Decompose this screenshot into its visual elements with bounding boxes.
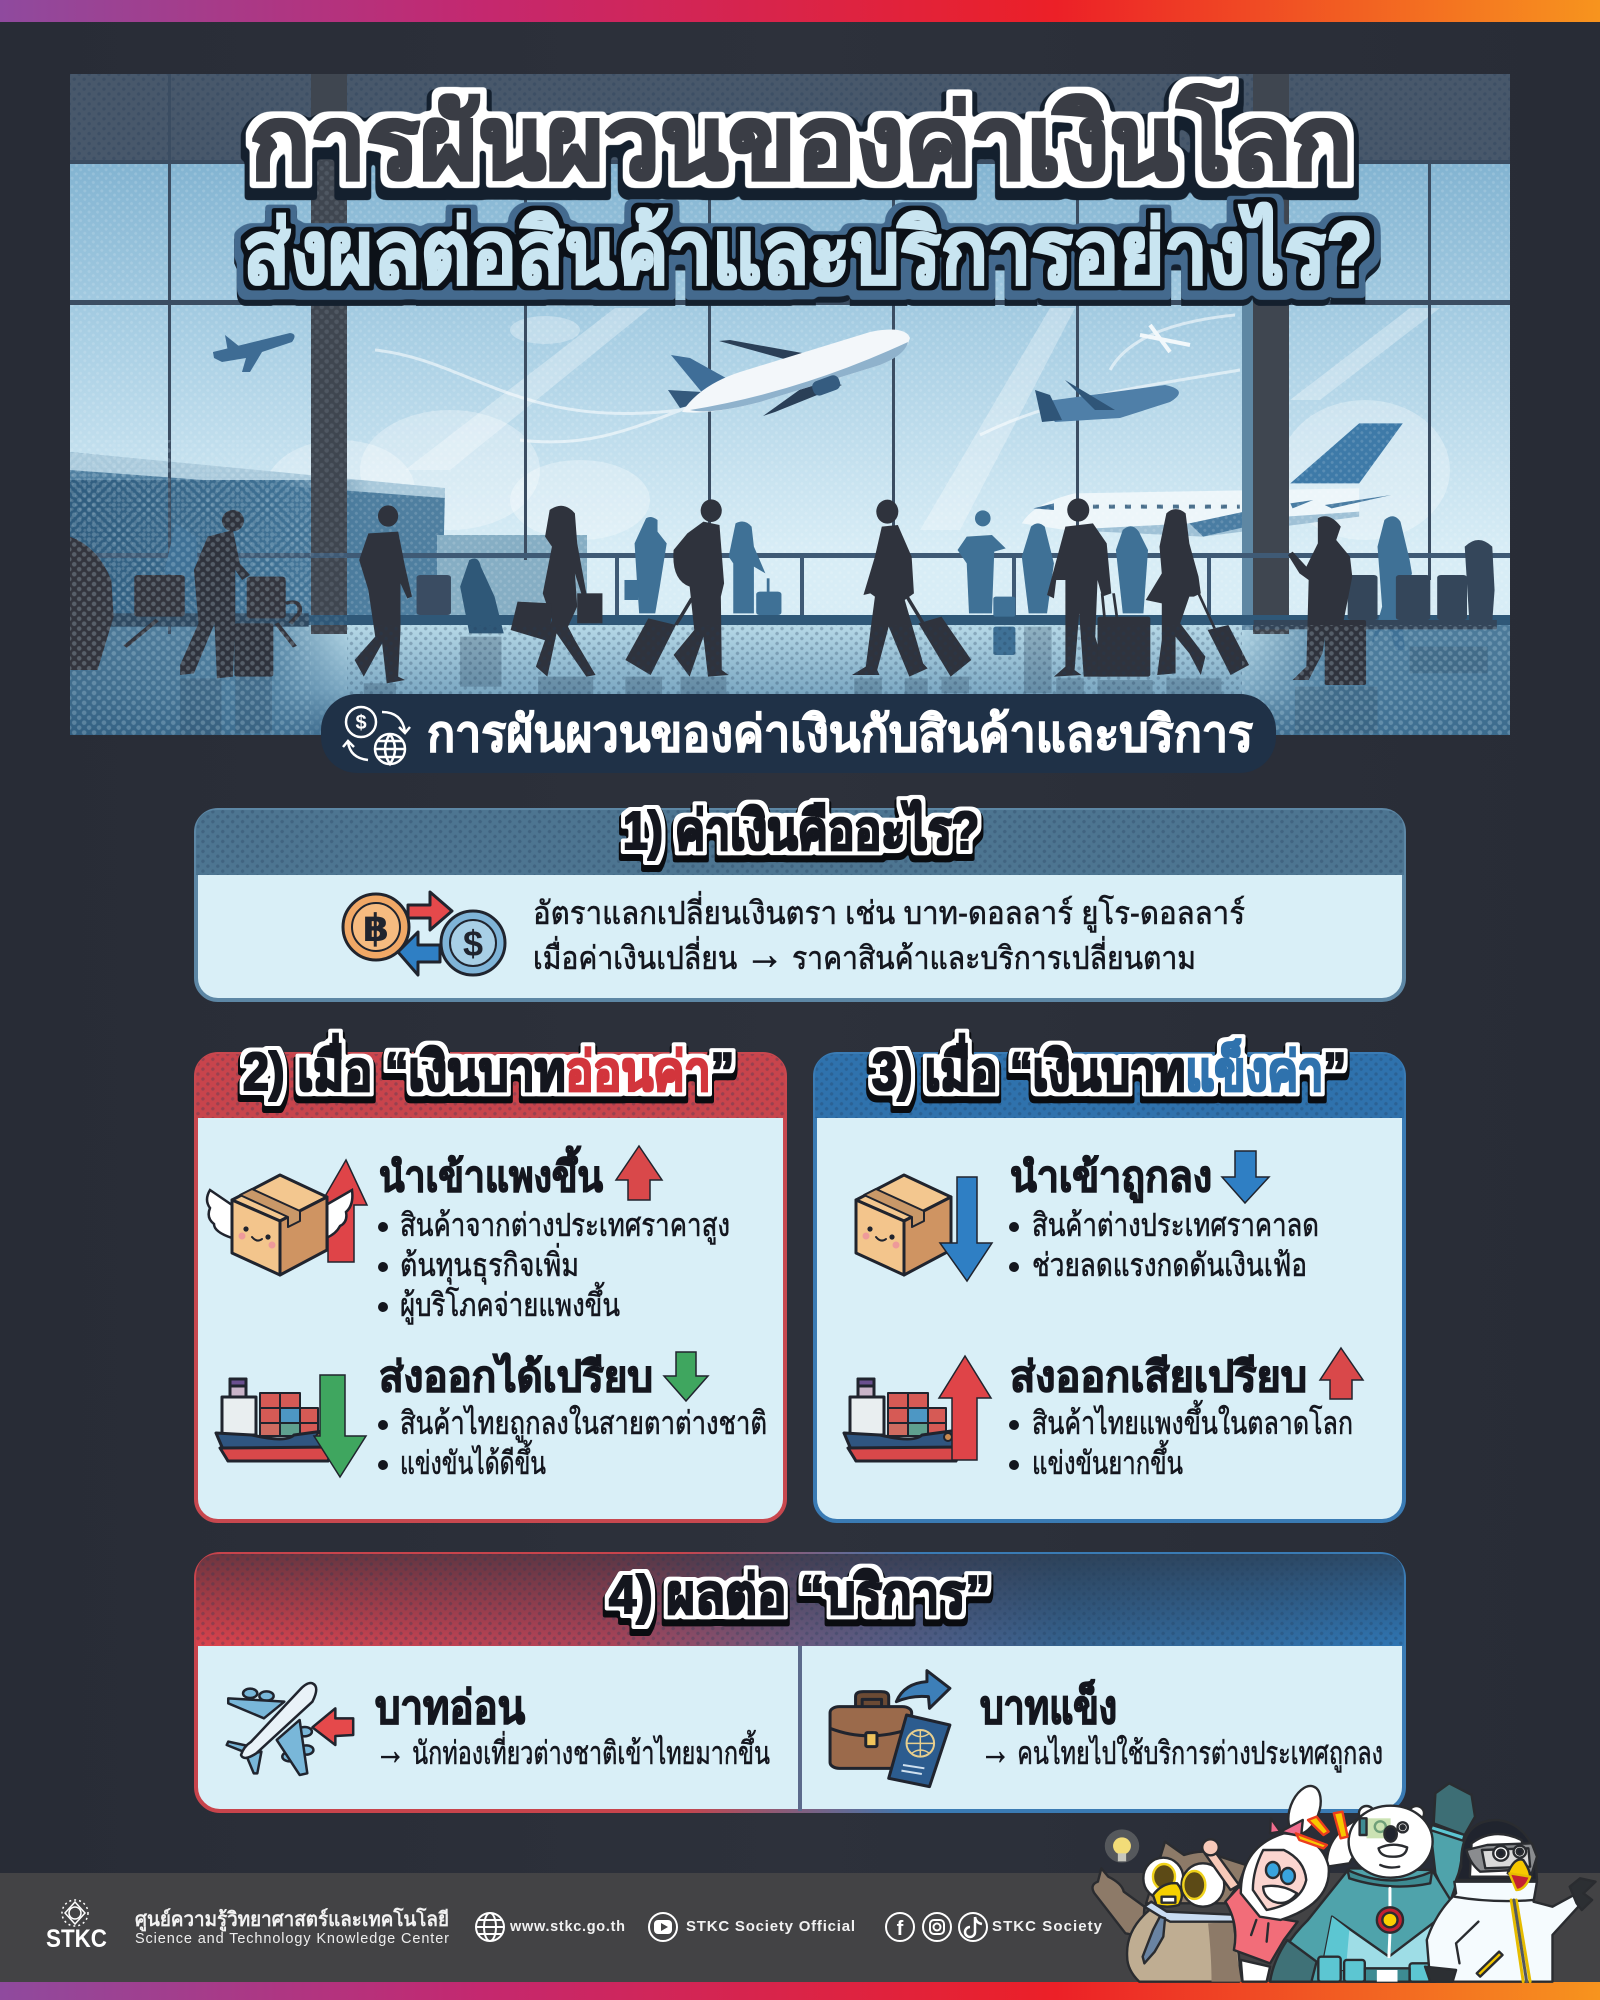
columns [311, 74, 347, 634]
bullet list: imports [378, 1207, 730, 1325]
hero illustration: airport terminal [70, 74, 1510, 735]
exclamation marks [1296, 1812, 1348, 1848]
panel 4: effect on services [196, 1554, 1404, 1811]
panel 3: strong baht [815, 1033, 1404, 1521]
icon: box with down arrow [856, 1175, 992, 1281]
small plane top left [213, 333, 295, 372]
icon: plane with inbound arrow [227, 1683, 353, 1775]
footer social icons: STKC Society [992, 1918, 1103, 1935]
bottom gradient bar [0, 1982, 1600, 2000]
bullet list: exports [1009, 1400, 1353, 1481]
travellers, left half [70, 499, 781, 735]
sub-heading: exports: ส่งออกได้เปรียบ [379, 1352, 653, 1400]
glass halftone [70, 160, 1510, 735]
title: first line: การผันผวนของค่าเงินโลก [250, 84, 1352, 200]
icon: ship with down arrow [216, 1375, 366, 1477]
roof band [70, 74, 1510, 160]
heading: 2) เมื่อ “เงินบาทอ่อนค่า” [243, 1033, 734, 1102]
icon: ship with up arrow [844, 1356, 991, 1461]
label: strong baht: บาทแข็ง [980, 1679, 1117, 1733]
bullet list: imports: ผู้บริโภคจ่ายแพงขึ้น [400, 1282, 620, 1325]
bullet list: imports: ช่วยลดแรงกดดันเงินเฟ้อ [1032, 1247, 1307, 1283]
main plane [668, 330, 910, 416]
footer organisation name: ศูนย์ความรู้วิทยาศาสตร์และเทคโนโลยี [135, 1907, 449, 1933]
top gradient bar [0, 0, 1600, 22]
footer website: www.stkc.go.th [509, 1919, 625, 1935]
tiny contrail plane [1140, 325, 1190, 352]
sub-heading: imports: นำเข้าแพงขึ้น [379, 1145, 603, 1200]
icon: currency and globe [343, 707, 410, 764]
bullet list: imports: สินค้าต่างประเทศราคาลด [1032, 1207, 1319, 1243]
arrow down [664, 1352, 708, 1401]
footer organisation name: Science and Technology Knowledge Center [135, 1931, 449, 1947]
owl mascot [1093, 1842, 1246, 1982]
rabbit mascot [1202, 1782, 1365, 1982]
footer logo: STKC [46, 1925, 107, 1953]
light bulb [1105, 1829, 1139, 1863]
footer youtube [649, 1913, 855, 1941]
arrow up [616, 1146, 662, 1200]
bullet list: exports: สินค้าไทยแพงขึ้นในตลาดโลก [1032, 1400, 1353, 1441]
icon: currency exchange [343, 892, 505, 975]
footer organisation name [135, 1907, 449, 1947]
arrow up [1320, 1348, 1363, 1399]
bullet list: exports [378, 1405, 767, 1481]
bullet list: exports: แข่งขันยากขึ้น [1032, 1440, 1183, 1481]
darker halftone at sides [70, 440, 311, 735]
heading: 4) ผลต่อ “บริการ” [609, 1565, 990, 1625]
floor reflections [180, 637, 726, 735]
floor [70, 622, 1510, 735]
bullet list: exports: แข่งขันได้ดีขึ้น [400, 1440, 546, 1481]
text: Thais abroad: → คนไทยไปใช้บริการต่างประเทศถูกลง [980, 1726, 1383, 1773]
floor reflections [854, 627, 1488, 733]
text: tourists: → นักท่องเที่ยวต่างชาติเข้าไทยมากขึ้น [375, 1726, 770, 1773]
panel 1: what is currency value [196, 799, 1404, 1000]
penguin mascot [1425, 1820, 1596, 1982]
bullet list: imports [1009, 1207, 1319, 1283]
icon: currency exchange: $ [463, 923, 483, 964]
heading: 3) เมื่อ “เงินบาทแข็งค่า” [872, 1033, 1346, 1102]
footer band [0, 1873, 1600, 1982]
arrow down [1222, 1151, 1269, 1203]
second plane right [1040, 385, 1179, 422]
heading: 1) ค่าเงินคืออะไร? [623, 799, 979, 861]
contrails [375, 315, 1240, 442]
sub-heading: exports: ส่งออกเสียเปรียบ [1010, 1353, 1307, 1400]
subtitle pill [321, 694, 1276, 773]
subtitle pill: $ [355, 712, 367, 734]
footer social icons [886, 1913, 1103, 1941]
footer social icons: f [897, 1918, 904, 1940]
body text: อัตราแลกเปลี่ยนเงินตรา เช่น บาท-ดอลลาร์ ยูโร-ดอลลาร์ [533, 891, 1245, 933]
travellers, right half [852, 498, 1497, 733]
title: second line: ส่งผลต่อสินค้าและบริการอย่างไร? [243, 203, 1373, 302]
mascots [1093, 1782, 1596, 1982]
icon: currency exchange: ฿ [363, 908, 389, 950]
sub-heading: imports: นำเข้าถูกลง [1010, 1153, 1212, 1203]
label: weak baht: บาทอ่อน [375, 1681, 525, 1733]
subtitle pill: การผันผวนของค่าเงินกับสินค้าและบริการ [427, 706, 1253, 762]
footer youtube: STKC Society Official [686, 1918, 855, 1935]
bullet list: imports: สินค้าจากต่างประเทศราคาสูง [400, 1207, 730, 1245]
sky beams and clouds [265, 308, 1450, 540]
parked airliner [1022, 423, 1403, 537]
window mullions [70, 74, 1510, 634]
footer website [476, 1913, 625, 1941]
bullet list: exports: สินค้าไทยถูกลงในสายตาต่างชาติ [400, 1405, 767, 1443]
railing [70, 553, 1510, 625]
icon: briefcase and passport [830, 1671, 950, 1787]
bullet list: imports: ต้นทุนธุรกิจเพิ่ม [400, 1243, 579, 1285]
icon: winged box with up arrow [207, 1160, 367, 1275]
panel 2: weak baht [196, 1033, 785, 1521]
distant terminal building [70, 452, 445, 617]
polar bear mascot [1270, 1783, 1475, 1982]
panel 1: what is currency value: เมื่อค่าเงินเปลี่ยน → ราคาสินค้าและบริการเปลี่ยนตาม [533, 930, 1196, 979]
footer logo [46, 1900, 107, 1953]
